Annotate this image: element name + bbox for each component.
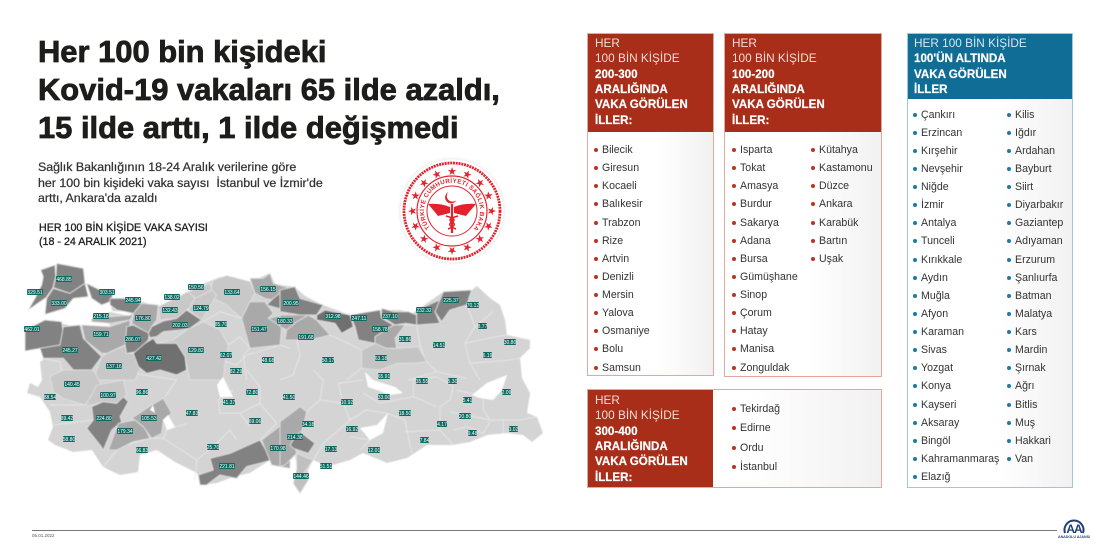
province list column 2: Bartın xyxy=(819,235,847,247)
province list column 2: Kastamonu xyxy=(819,162,873,174)
map value labels: 245.27 xyxy=(62,348,78,354)
map value labels: 63.18 xyxy=(375,356,387,362)
map value labels: 47.83 xyxy=(186,411,198,417)
province list column 2: Hakkari xyxy=(1015,435,1051,447)
province list column 1: Tokat xyxy=(740,162,765,174)
map value labels: 72.80 xyxy=(246,390,258,396)
map value labels: 215.18 xyxy=(93,314,109,320)
province list column 2: Erzurum xyxy=(1015,254,1055,266)
panel heading: 200-300 xyxy=(595,68,638,81)
province list column 1: Çorum xyxy=(740,307,772,319)
province list column 1 xyxy=(913,108,999,483)
map value labels: 62.07 xyxy=(220,353,232,359)
icon: health ministry emblem: ★ xyxy=(472,231,487,246)
province list column 1: Nevşehir xyxy=(921,163,963,175)
province list column 2: Karabük xyxy=(819,216,858,228)
map value labels: 25.70 xyxy=(207,445,219,451)
map value labels: 16.92 xyxy=(346,427,358,433)
panel heading: 100-200 xyxy=(732,68,775,81)
intro text xyxy=(38,160,323,205)
map value labels: 333.00 xyxy=(51,301,67,307)
icon: health ministry emblem: ★ xyxy=(481,219,495,233)
map value labels: 20.80 xyxy=(459,414,471,420)
map value labels: 88.54 xyxy=(44,395,56,401)
icon: health ministry emblem: ★ xyxy=(417,176,432,191)
province list: Mersin xyxy=(602,289,634,301)
province list: Balıkesir xyxy=(602,198,643,210)
province list column 1: Amasya xyxy=(740,180,778,192)
map value labels: 65.91 xyxy=(378,374,390,380)
panel heading xyxy=(588,34,713,132)
map value labels: 170.98 xyxy=(270,446,286,452)
province list column 1: Sivas xyxy=(921,344,947,356)
panel: 300-400 provinces xyxy=(587,389,882,488)
icon: health ministry emblem: ★ xyxy=(472,176,487,191)
map value labels: 158.78 xyxy=(372,327,388,333)
date: 05.01.2022 xyxy=(32,533,55,538)
province list: Giresun xyxy=(602,162,639,174)
map value labels: 18.50 xyxy=(399,411,411,417)
province list column 1: Isparta xyxy=(740,144,772,156)
province list column 2: Kütahya xyxy=(819,144,858,156)
map value labels: 214.38 xyxy=(287,435,303,441)
map value labels: 8.77 xyxy=(478,324,488,330)
province list column 2: Şanlıurfa xyxy=(1015,272,1057,284)
icon: Anadolu Agency logo: ANADOLU AJANSI xyxy=(1058,535,1090,539)
province list column 2: Bitlis xyxy=(1015,398,1037,410)
map value labels: 303.51 xyxy=(99,290,115,296)
province list column 2: Kilis xyxy=(1015,108,1034,120)
icon: health ministry emblem: ★ xyxy=(408,219,423,233)
icon: health ministry emblem: ★ xyxy=(430,167,444,182)
icon: health ministry emblem: ★ xyxy=(485,206,497,216)
panel heading xyxy=(908,34,1072,99)
map value labels: 329.51 xyxy=(27,290,43,296)
icon: health ministry emblem xyxy=(399,158,505,264)
province list: Trabzon xyxy=(602,216,640,228)
panel heading: HER xyxy=(595,393,620,407)
map value labels: 14.51 xyxy=(433,343,445,349)
panel heading: HER xyxy=(595,36,620,50)
map value labels: 50.17 xyxy=(322,358,334,364)
province list: Kocaeli xyxy=(602,180,637,192)
province list: İstanbul xyxy=(740,461,777,473)
map value labels: 89.42 xyxy=(61,416,73,422)
map value labels: 200.95 xyxy=(283,301,299,307)
map value labels: 70.12 xyxy=(467,303,479,309)
map value labels: 144.46 xyxy=(293,474,309,480)
province list column 2: Uşak xyxy=(819,253,843,265)
icon: health ministry emblem: ★ xyxy=(407,206,419,216)
icon: Anadolu Agency logo xyxy=(1058,520,1090,539)
map value labels: 100.97 xyxy=(100,393,116,399)
map value labels: 9.48 xyxy=(468,431,478,437)
map value labels: 124.79 xyxy=(193,306,209,312)
map value labels: 3.02 xyxy=(509,427,519,433)
map value labels: 468.85 xyxy=(56,277,72,283)
map value labels: 225.37 xyxy=(443,298,459,304)
map value labels: 5.30 xyxy=(448,379,458,385)
province list column 1: Aydın xyxy=(921,272,948,284)
panel heading: HER 100 BİN KİŞİDE xyxy=(914,36,1027,50)
province list column 2: Muş xyxy=(1015,417,1035,429)
map value labels: 159.71 xyxy=(93,332,109,338)
map value labels: 202.03 xyxy=(172,323,188,329)
province list column 1: Afyon xyxy=(921,308,948,320)
province list: Yalova xyxy=(602,307,634,319)
province list column 2: Ağrı xyxy=(1015,380,1034,392)
panel heading: İLLER: xyxy=(595,471,632,484)
panel heading: ARALIĞINDA xyxy=(595,440,668,453)
map value labels: 150.56 xyxy=(188,285,204,291)
province list column 2 xyxy=(811,144,873,265)
map value labels: 245.94 xyxy=(125,298,141,304)
map value labels: 85.70 xyxy=(215,322,227,328)
province list xyxy=(732,403,780,473)
map value labels: 48.68 xyxy=(262,358,274,364)
panel heading: İLLER: xyxy=(732,114,769,127)
map value labels: 7.84 xyxy=(420,438,430,444)
province list column 1: Kayseri xyxy=(921,398,956,410)
panel: 200-300 provinces xyxy=(587,33,714,376)
province list xyxy=(594,144,650,374)
map value labels: 35.55 xyxy=(416,379,428,385)
map value labels: 221.81 xyxy=(219,464,235,470)
title: 15 ilde arttı, 1 ilde değişmedi xyxy=(38,110,459,145)
map value labels: 312.98 xyxy=(325,314,341,320)
province list column 1: Burdur xyxy=(740,198,772,210)
map value labels: 58.80 xyxy=(63,437,75,443)
province list column 1: Konya xyxy=(921,380,951,392)
map value labels: 191.68 xyxy=(298,335,314,341)
province list column 2: Şırnak xyxy=(1015,362,1046,374)
map value labels: 30.80 xyxy=(504,340,516,346)
panel heading: 100 BİN KİŞİDE xyxy=(732,51,817,65)
icon: health ministry emblem: ★ xyxy=(417,231,432,246)
province list: Bolu xyxy=(602,343,623,355)
map value labels xyxy=(24,276,519,480)
province list column 1: Manisa xyxy=(740,343,774,355)
panel heading: 100 BİN KİŞİDE xyxy=(595,51,680,65)
province list: Tekirdağ xyxy=(740,403,780,415)
province list column 2: Ardahan xyxy=(1015,145,1055,157)
province list column 2: Kars xyxy=(1015,326,1037,338)
panel heading: HER xyxy=(732,36,757,50)
province list: Samsun xyxy=(602,362,641,374)
panel heading: ARALIĞINDA xyxy=(595,83,668,96)
map value labels: 6.19 xyxy=(483,353,493,359)
panel heading: İLLER: xyxy=(595,114,632,127)
map value labels: 247.11 xyxy=(352,316,367,322)
map value labels: 237.10 xyxy=(382,314,398,320)
province list column 2: Van xyxy=(1015,453,1033,465)
panel heading: İLLER xyxy=(914,83,948,96)
province list column 1: Adana xyxy=(740,235,771,247)
province list column 2 xyxy=(1007,108,1064,465)
province list: Ordu xyxy=(740,442,764,454)
panel: 100-200 provinces xyxy=(724,33,882,377)
map value labels: 17.13 xyxy=(325,447,337,453)
map heading: (18 - 24 ARALIK 2021) xyxy=(39,236,147,248)
province list column 2: Diyarbakır xyxy=(1015,199,1063,211)
map of Turkey xyxy=(24,262,544,494)
map value labels: 4.17 xyxy=(437,422,447,428)
footer rule xyxy=(32,530,1057,531)
map value labels: 232.32 xyxy=(416,308,432,314)
panel: under 100 provinces xyxy=(907,33,1073,488)
map value labels: 129.82 xyxy=(188,348,204,354)
province list column 2: Mardin xyxy=(1015,344,1047,356)
province list column 1: Niğde xyxy=(921,181,949,193)
province list column 2: Ankara xyxy=(819,198,853,210)
province list column 1: Bursa xyxy=(740,253,768,265)
province list column 2: Siirt xyxy=(1015,181,1033,193)
map value labels: 2.09 xyxy=(502,390,512,396)
province list column 2: Gaziantep xyxy=(1015,217,1063,229)
panel heading: VAKA GÖRÜLEN xyxy=(914,68,1007,81)
map value labels: 31.86 xyxy=(399,337,411,343)
map heading xyxy=(39,221,208,248)
province list column 2: Batman xyxy=(1015,290,1052,302)
map value labels: 224.80 xyxy=(96,416,112,422)
province list column 1: Gümüşhane xyxy=(740,271,798,283)
province list column 1: Yozgat xyxy=(921,362,953,374)
province list column 1: Antalya xyxy=(921,217,956,229)
map value labels: 138.02 xyxy=(164,295,180,301)
map value labels: 140.45 xyxy=(64,382,80,388)
title xyxy=(38,34,500,145)
map value labels: 10.92 xyxy=(341,400,353,406)
province list column 1: Bingöl xyxy=(921,435,950,447)
province list column 1: Kırşehir xyxy=(921,145,958,157)
panel heading: VAKA GÖRÜLEN xyxy=(732,98,825,111)
province list: Artvin xyxy=(602,253,629,265)
province list column 1: Karaman xyxy=(921,326,964,338)
province list column 1: Kırıkkale xyxy=(921,254,962,266)
intro text: her 100 bin kişideki vaka sayısı İstanbul ve İzmir'de xyxy=(38,176,323,190)
panel heading xyxy=(725,34,881,132)
map value labels: 41.50 xyxy=(283,395,295,401)
province list column 1: Elazığ xyxy=(921,471,950,483)
intro text: arttı, Ankara'da azaldı xyxy=(38,191,157,205)
icon: health ministry emblem: ★ xyxy=(460,240,474,255)
map shapes xyxy=(25,263,543,493)
icon: health ministry emblem: ★ xyxy=(481,189,496,203)
map value labels: 156.15 xyxy=(260,287,276,293)
icon: health ministry emblem: ★ xyxy=(430,240,444,254)
icon: health ministry emblem: ★ xyxy=(447,166,457,178)
province list column 2: Adıyaman xyxy=(1015,235,1063,247)
panel heading xyxy=(588,390,713,487)
province list column 1: Aksaray xyxy=(921,417,959,429)
panel heading: 300-400 xyxy=(595,425,638,438)
icon: Anadolu Agency logo: AA xyxy=(1066,522,1083,536)
province list column 2: Düzce xyxy=(819,180,849,192)
map value labels: 66.83 xyxy=(136,448,148,454)
map value labels: 286.07 xyxy=(125,337,141,343)
map value labels: 33.00 xyxy=(378,395,390,401)
panel heading: VAKA GÖRÜLEN xyxy=(595,98,688,111)
map value labels: 34.18 xyxy=(302,422,314,428)
map value labels: 105.53 xyxy=(141,416,157,422)
province list column 1: Kahramanmaraş xyxy=(921,453,999,465)
panel heading: 100'ÜN ALTINDA xyxy=(914,52,1006,65)
province list column 1: Sakarya xyxy=(740,216,779,228)
province list: Bilecik xyxy=(602,144,633,156)
icon: health ministry emblem: ★ xyxy=(447,244,457,256)
province list column 2: Bayburt xyxy=(1015,163,1052,175)
intro text: Sağlık Bakanlığının 18-24 Aralık verilerine göre xyxy=(38,160,296,174)
map value labels: 5.41 xyxy=(463,398,473,404)
map value labels: 12.01 xyxy=(368,448,380,454)
province list column 1: İzmir xyxy=(921,199,944,211)
map value labels: 41.37 xyxy=(223,400,235,406)
province list: Denizli xyxy=(602,271,634,283)
map value labels: 132.43 xyxy=(162,308,178,314)
map value labels: 176.80 xyxy=(135,316,151,322)
icon: health ministry emblem: ★ xyxy=(460,168,474,182)
province list: Rize xyxy=(602,235,623,247)
map value labels: 133.64 xyxy=(224,290,240,296)
panel heading: ARALIĞINDA xyxy=(732,83,805,96)
map value labels: 462.01 xyxy=(24,327,40,333)
province list column 1: Erzincan xyxy=(921,127,962,139)
province list column 1: Hatay xyxy=(740,325,768,337)
province list: Osmaniye xyxy=(602,325,650,337)
province list column 2: Malatya xyxy=(1015,308,1052,320)
map value labels: 69.06 xyxy=(249,419,261,425)
province list column 1: Zonguldak xyxy=(740,362,789,374)
province list: Edirne xyxy=(740,422,771,434)
map value labels: 151.47 xyxy=(251,327,267,333)
map heading: HER 100 BİN KİŞİDE VAKA SAYISI xyxy=(39,222,208,234)
province list column 1: Sinop xyxy=(740,289,767,301)
province list column 1: Muğla xyxy=(921,290,950,302)
map value labels: 179.34 xyxy=(117,429,133,435)
panel heading: 100 BİN KİŞİDE xyxy=(595,408,680,422)
province list column 2: Iğdır xyxy=(1015,127,1036,139)
map value labels: 427.42 xyxy=(146,356,162,362)
province list column 1: Çankırı xyxy=(921,108,955,120)
panel heading: VAKA GÖRÜLEN xyxy=(595,455,688,468)
title: Kovid-19 vakaları 65 ilde azaldı, xyxy=(38,72,500,107)
map value labels: 51.51 xyxy=(320,464,332,470)
icon: health ministry emblem: ★ xyxy=(409,189,423,203)
map value labels: 82.29 xyxy=(230,369,242,375)
map value labels: 96.86 xyxy=(136,390,148,396)
province list column 1: Tunceli xyxy=(921,235,955,247)
map value labels: 137.16 xyxy=(106,364,122,370)
title: Her 100 bin kişideki xyxy=(38,34,326,69)
province list column 1 xyxy=(732,144,798,374)
map value labels: 180.33 xyxy=(277,319,293,325)
